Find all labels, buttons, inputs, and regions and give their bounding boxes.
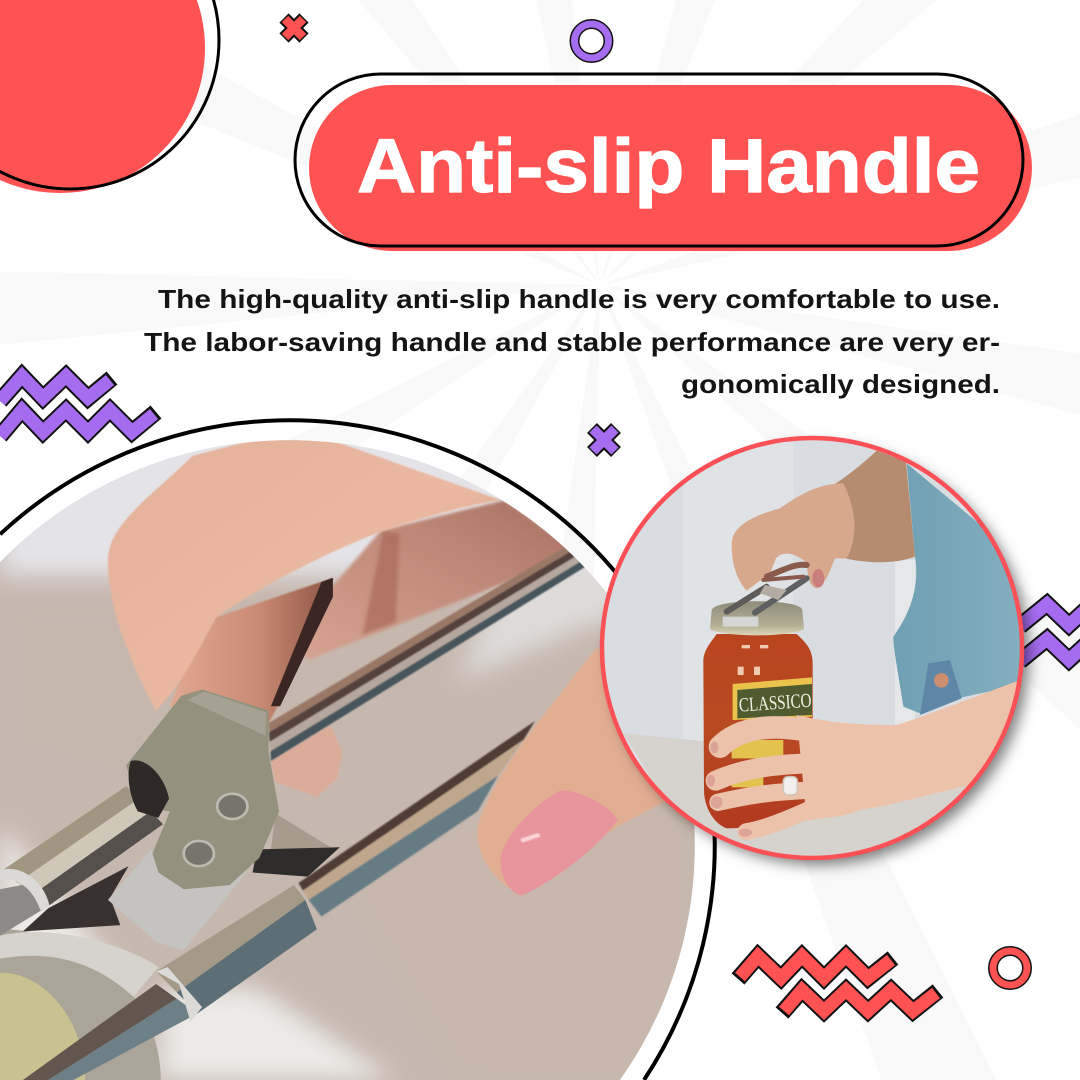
dark chrome shadow [23,866,129,931]
counter [624,734,968,856]
icon: purple cross [592,428,616,452]
panel: large photo of hand on can opener handle [0,420,716,1080]
left collar [0,869,50,910]
crease [363,532,400,635]
dark slit [271,578,333,706]
rear latch [253,847,340,877]
fingernail [812,569,824,588]
opener [727,565,807,613]
can lid gold [0,973,85,1080]
olive plate [126,689,279,889]
large circle outline [0,420,715,1080]
zigzag: purple right [1020,604,1080,661]
left bar [0,885,45,936]
body paragraph [144,284,1000,399]
icon: red cross [284,18,304,38]
nail highlight [521,835,540,841]
ring [783,777,797,795]
can ring [0,929,161,1080]
top-left red circle with outline [0,0,219,193]
left sleeve [2,786,163,906]
thumb nail [501,790,618,896]
bottom bar [23,984,197,1080]
body paragraph: The high-quality anti-slip handle is very comfortable to use. [158,284,1000,314]
jar lid [710,601,804,635]
button [934,673,949,688]
zigzag: purple left [0,376,156,436]
chrome ring highlight [0,932,158,997]
jeans [920,660,962,715]
knuckle below bar [271,725,342,797]
jar label [733,677,812,720]
plate highlight [187,691,266,736]
rear latch top [271,814,331,849]
icon: purple ring [574,24,608,58]
clip under plate [108,849,248,950]
backdrop tones [0,420,716,1080]
thumb [478,647,670,896]
panel: small photo of hands opening a sauce jar [602,438,1022,858]
small photo border [602,438,1022,858]
fingers [716,727,830,832]
zigzag: red bottom [738,956,938,1013]
upper bar [269,544,588,761]
shirt [893,463,1027,713]
forearm upper [833,451,915,562]
lower sleeve [156,885,317,1013]
rivet [184,841,214,866]
lower label [732,740,783,787]
finger behind [294,500,569,660]
lower arm and palm [797,680,1027,821]
upper hand [732,483,854,591]
bottom collar [156,967,202,1022]
plate hole [129,760,169,818]
body paragraph: The labor-saving handle and stable performance are very er- [144,327,1000,357]
fingertips [707,741,752,837]
jar body [703,634,813,828]
index finger [108,428,501,710]
lower bar [298,721,535,917]
rivet [217,794,248,819]
opener clamp [723,617,758,627]
title pill [295,74,1032,251]
wall panels [603,438,1023,748]
opener plate [760,585,787,600]
icon: red ring [993,951,1027,985]
lower finger segment [170,578,333,723]
title text: Anti-slip Handle [357,124,980,209]
jar highlights [738,645,768,675]
label text: CLASSICO [738,690,812,717]
body paragraph: gonomically designed. [681,369,1000,399]
